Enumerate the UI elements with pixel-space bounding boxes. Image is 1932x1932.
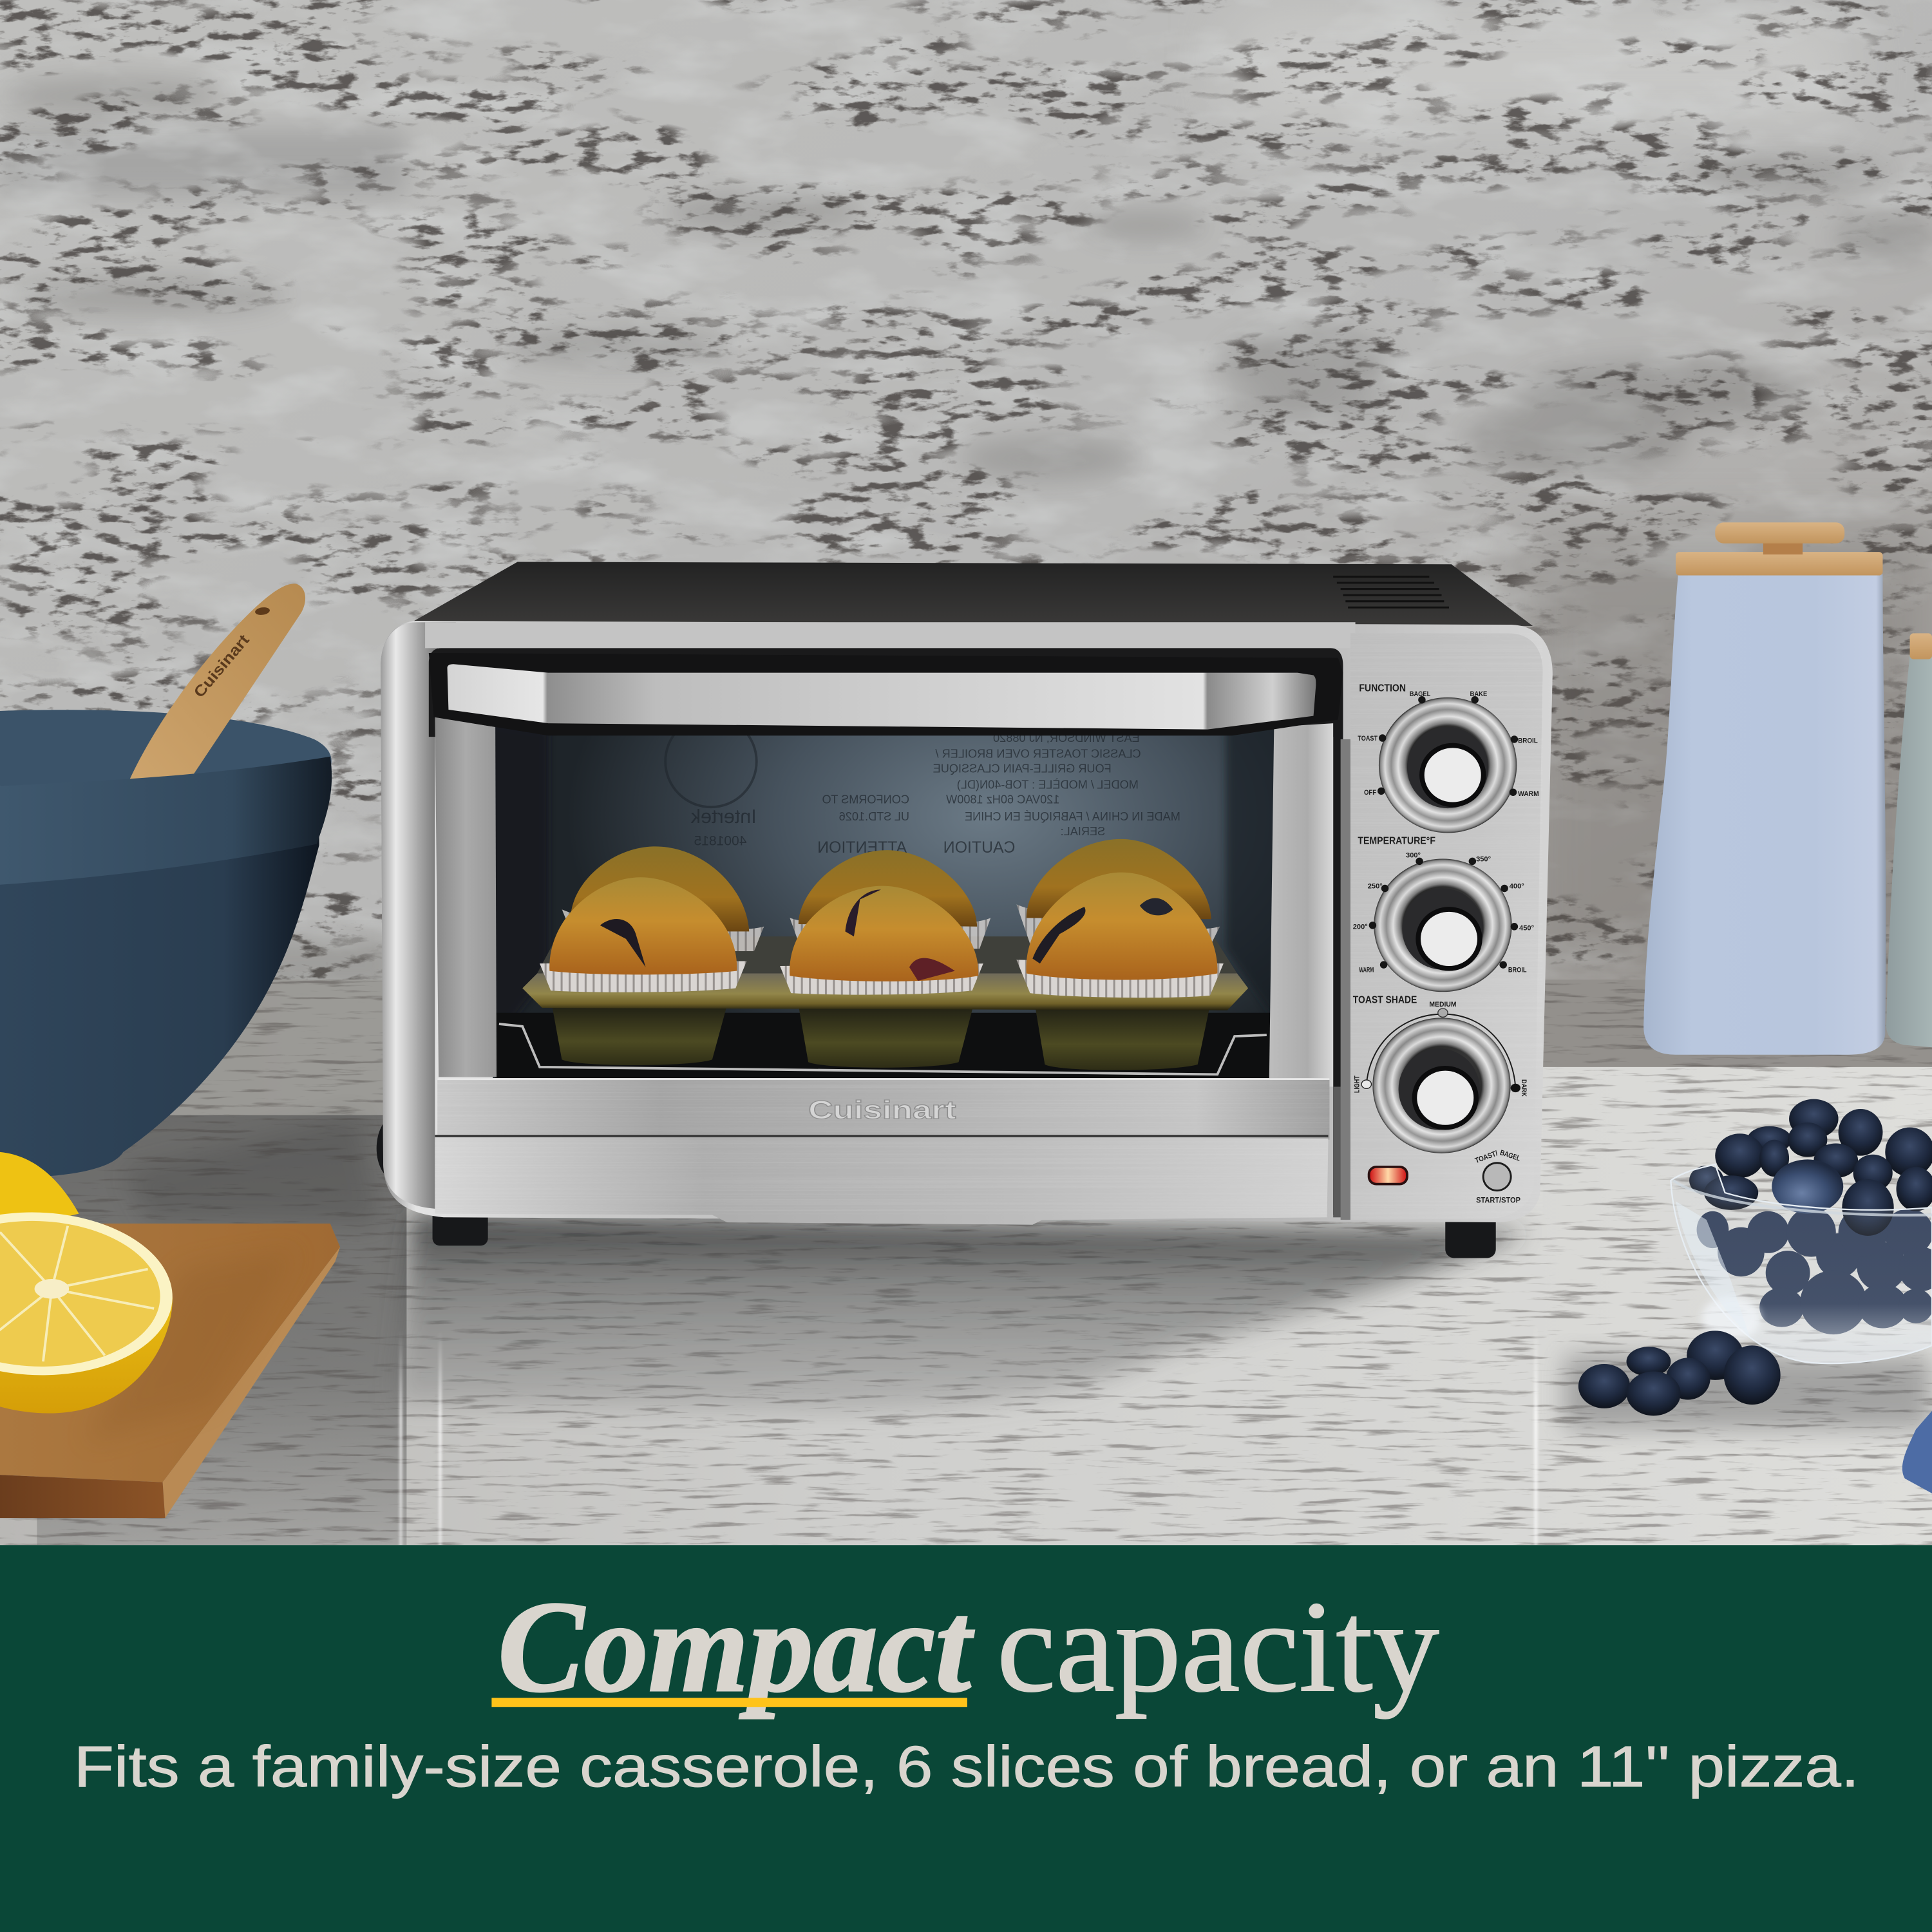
panel labels: WARM xyxy=(1359,967,1374,974)
oven rack xyxy=(499,1024,1267,1074)
reflections: oven edges on counter xyxy=(399,1325,1538,1553)
bowl inside xyxy=(0,710,332,786)
blue cloth xyxy=(1902,1411,1932,1493)
knob: toast shade xyxy=(1372,1018,1511,1153)
cut lemon xyxy=(0,1208,175,1414)
mirrored rating plate text: 120VAC 60Hz 1800W xyxy=(945,793,1059,806)
mirrored rating plate text: ATTENTION xyxy=(817,838,907,857)
panel labels xyxy=(1353,683,1539,1204)
dial tick dots xyxy=(1369,696,1518,969)
mirrored rating plate text: FOUR GRILLE-PAIN CLASSIQUE xyxy=(933,762,1112,775)
panel labels: BROIL xyxy=(1518,737,1538,745)
shadow: bowl on counter xyxy=(123,1115,382,1226)
banner: dark green caption panel xyxy=(0,1545,1932,1932)
right control panel xyxy=(1350,633,1543,1220)
shadow: berries on counter xyxy=(1565,1356,1932,1429)
door handle xyxy=(448,664,1316,730)
subheading: Fits a family-size casserole, 6 slices of bread, or an 11'' pizza. xyxy=(74,1735,1859,1799)
toaster oven xyxy=(377,562,1553,1258)
mirrored rating plate text xyxy=(690,732,1180,857)
interior side walls xyxy=(487,721,548,1054)
front muffin cups xyxy=(540,960,1224,998)
toast shade scale arc xyxy=(1361,1009,1520,1092)
panel labels: BAKE xyxy=(1470,690,1487,698)
Cuisinart logo: Cuisinart xyxy=(808,1095,956,1124)
mirrored rating plate text: CLASSIC TOASTER OVEN BROILER / xyxy=(935,748,1141,761)
left door post xyxy=(435,717,497,1077)
door black frame xyxy=(429,648,1343,1215)
panel labels: TOAST xyxy=(1358,735,1378,743)
knob: temperature xyxy=(1374,859,1512,992)
panel labels: START/STOP xyxy=(1476,1195,1520,1204)
cutting board xyxy=(0,1224,340,1518)
heading: Compact capacity: capacity xyxy=(997,1574,1439,1719)
bowl body xyxy=(0,826,319,1178)
panel labels: 250° xyxy=(1368,882,1383,890)
panel labels: BROIL xyxy=(1508,967,1527,974)
canister: blue ceramic with wooden lid xyxy=(1643,522,1886,1055)
panel labels: TOAST/ xyxy=(1474,1150,1499,1165)
berries behind the rim xyxy=(1689,1099,1932,1211)
mirrored rating plate text: EAST WINDSOR, NJ 08820 xyxy=(993,732,1140,744)
panel labels: 200° xyxy=(1353,923,1368,931)
wooden spoon: Cuisinart xyxy=(191,631,253,701)
heading underline xyxy=(491,1698,967,1707)
oven feet xyxy=(377,1116,1496,1258)
panel labels: MEDIUM xyxy=(1429,1001,1457,1009)
wooden spoon xyxy=(129,583,305,780)
panel labels: OFF xyxy=(1364,789,1377,797)
mirrored rating plate text: CONFORMS TO xyxy=(822,793,909,806)
front muffin: right xyxy=(1026,873,1217,980)
glass bowl of blueberries xyxy=(1671,1099,1932,1363)
front muffin: left xyxy=(549,877,737,974)
glass bowl shell xyxy=(1671,1164,1932,1363)
loose blueberries xyxy=(1578,1331,1781,1416)
mirrored rating plate text: Intertek xyxy=(690,806,757,828)
mirrored rating plate text: SERIAL: xyxy=(1061,825,1105,838)
back lemon half xyxy=(0,1152,79,1232)
panel labels: TOAST SHADE xyxy=(1353,994,1417,1005)
vent slots xyxy=(1333,576,1449,607)
drawer xyxy=(435,1136,1329,1225)
floor xyxy=(495,1013,1274,1087)
panel labels: 450° xyxy=(1519,925,1534,933)
counter: marble worktop with lighting xyxy=(0,980,1932,1553)
canister: second grey-green, cropped xyxy=(1886,633,1932,1047)
heading: Compact capacity xyxy=(498,1574,1439,1719)
oven body shell xyxy=(381,621,1553,1222)
panel labels: 400° xyxy=(1510,882,1524,890)
panel labels: BAGEL xyxy=(1410,690,1431,698)
panel labels: 350° xyxy=(1476,855,1491,863)
indicator light xyxy=(1368,1166,1408,1186)
panel labels: TEMPERATURE°F xyxy=(1358,836,1435,847)
mirrored rating plate text: CAUTION xyxy=(943,838,1016,857)
mirrored rating plate text: UL STD.1026 xyxy=(839,810,909,823)
panel labels: LIGHT xyxy=(1353,1075,1361,1093)
lower door band xyxy=(437,1078,1329,1140)
panel separator xyxy=(1341,739,1350,1220)
door handle black gasket xyxy=(429,653,1343,735)
mirrored rating plate text: MODEL / MODÈLE : TOB-40N(DL) xyxy=(957,778,1139,791)
muffin pan xyxy=(522,973,1248,1010)
heading: Compact capacity: Compact xyxy=(498,1574,974,1719)
mixing bowl with wooden spoon xyxy=(0,583,332,1178)
panel labels: WARM xyxy=(1518,790,1539,798)
top body strip xyxy=(425,622,1356,648)
panel labels: DARK xyxy=(1520,1079,1528,1097)
oven black top xyxy=(414,562,1533,626)
start stop button xyxy=(1482,1162,1512,1191)
panel labels: 300° xyxy=(1406,852,1421,860)
canister lid xyxy=(1676,552,1882,575)
knob: function xyxy=(1379,697,1517,833)
back muffins xyxy=(571,839,1211,931)
panel labels: BAGEL xyxy=(1499,1149,1521,1163)
pan surface behind the cups xyxy=(537,936,1237,973)
shadow: under the oven xyxy=(394,1214,1528,1412)
panel labels: FUNCTION xyxy=(1359,683,1406,694)
pan wells xyxy=(552,1005,1210,1070)
mirrored rating plate text: MADE IN CHINA / FABRIQUÉ EN CHINE xyxy=(965,810,1180,823)
oven interior xyxy=(487,716,1282,1087)
wall: grey plaster backdrop xyxy=(0,0,1932,992)
front muffin: middle xyxy=(790,886,978,981)
left body post xyxy=(381,622,456,1209)
right door post xyxy=(1269,723,1333,1087)
bowl rim band xyxy=(0,757,332,885)
main berry xyxy=(1772,1159,1843,1214)
mirrored rating plate text: 4001815 xyxy=(694,834,746,849)
back muffin cups xyxy=(562,904,1220,951)
berries in the glass xyxy=(1697,1208,1932,1334)
